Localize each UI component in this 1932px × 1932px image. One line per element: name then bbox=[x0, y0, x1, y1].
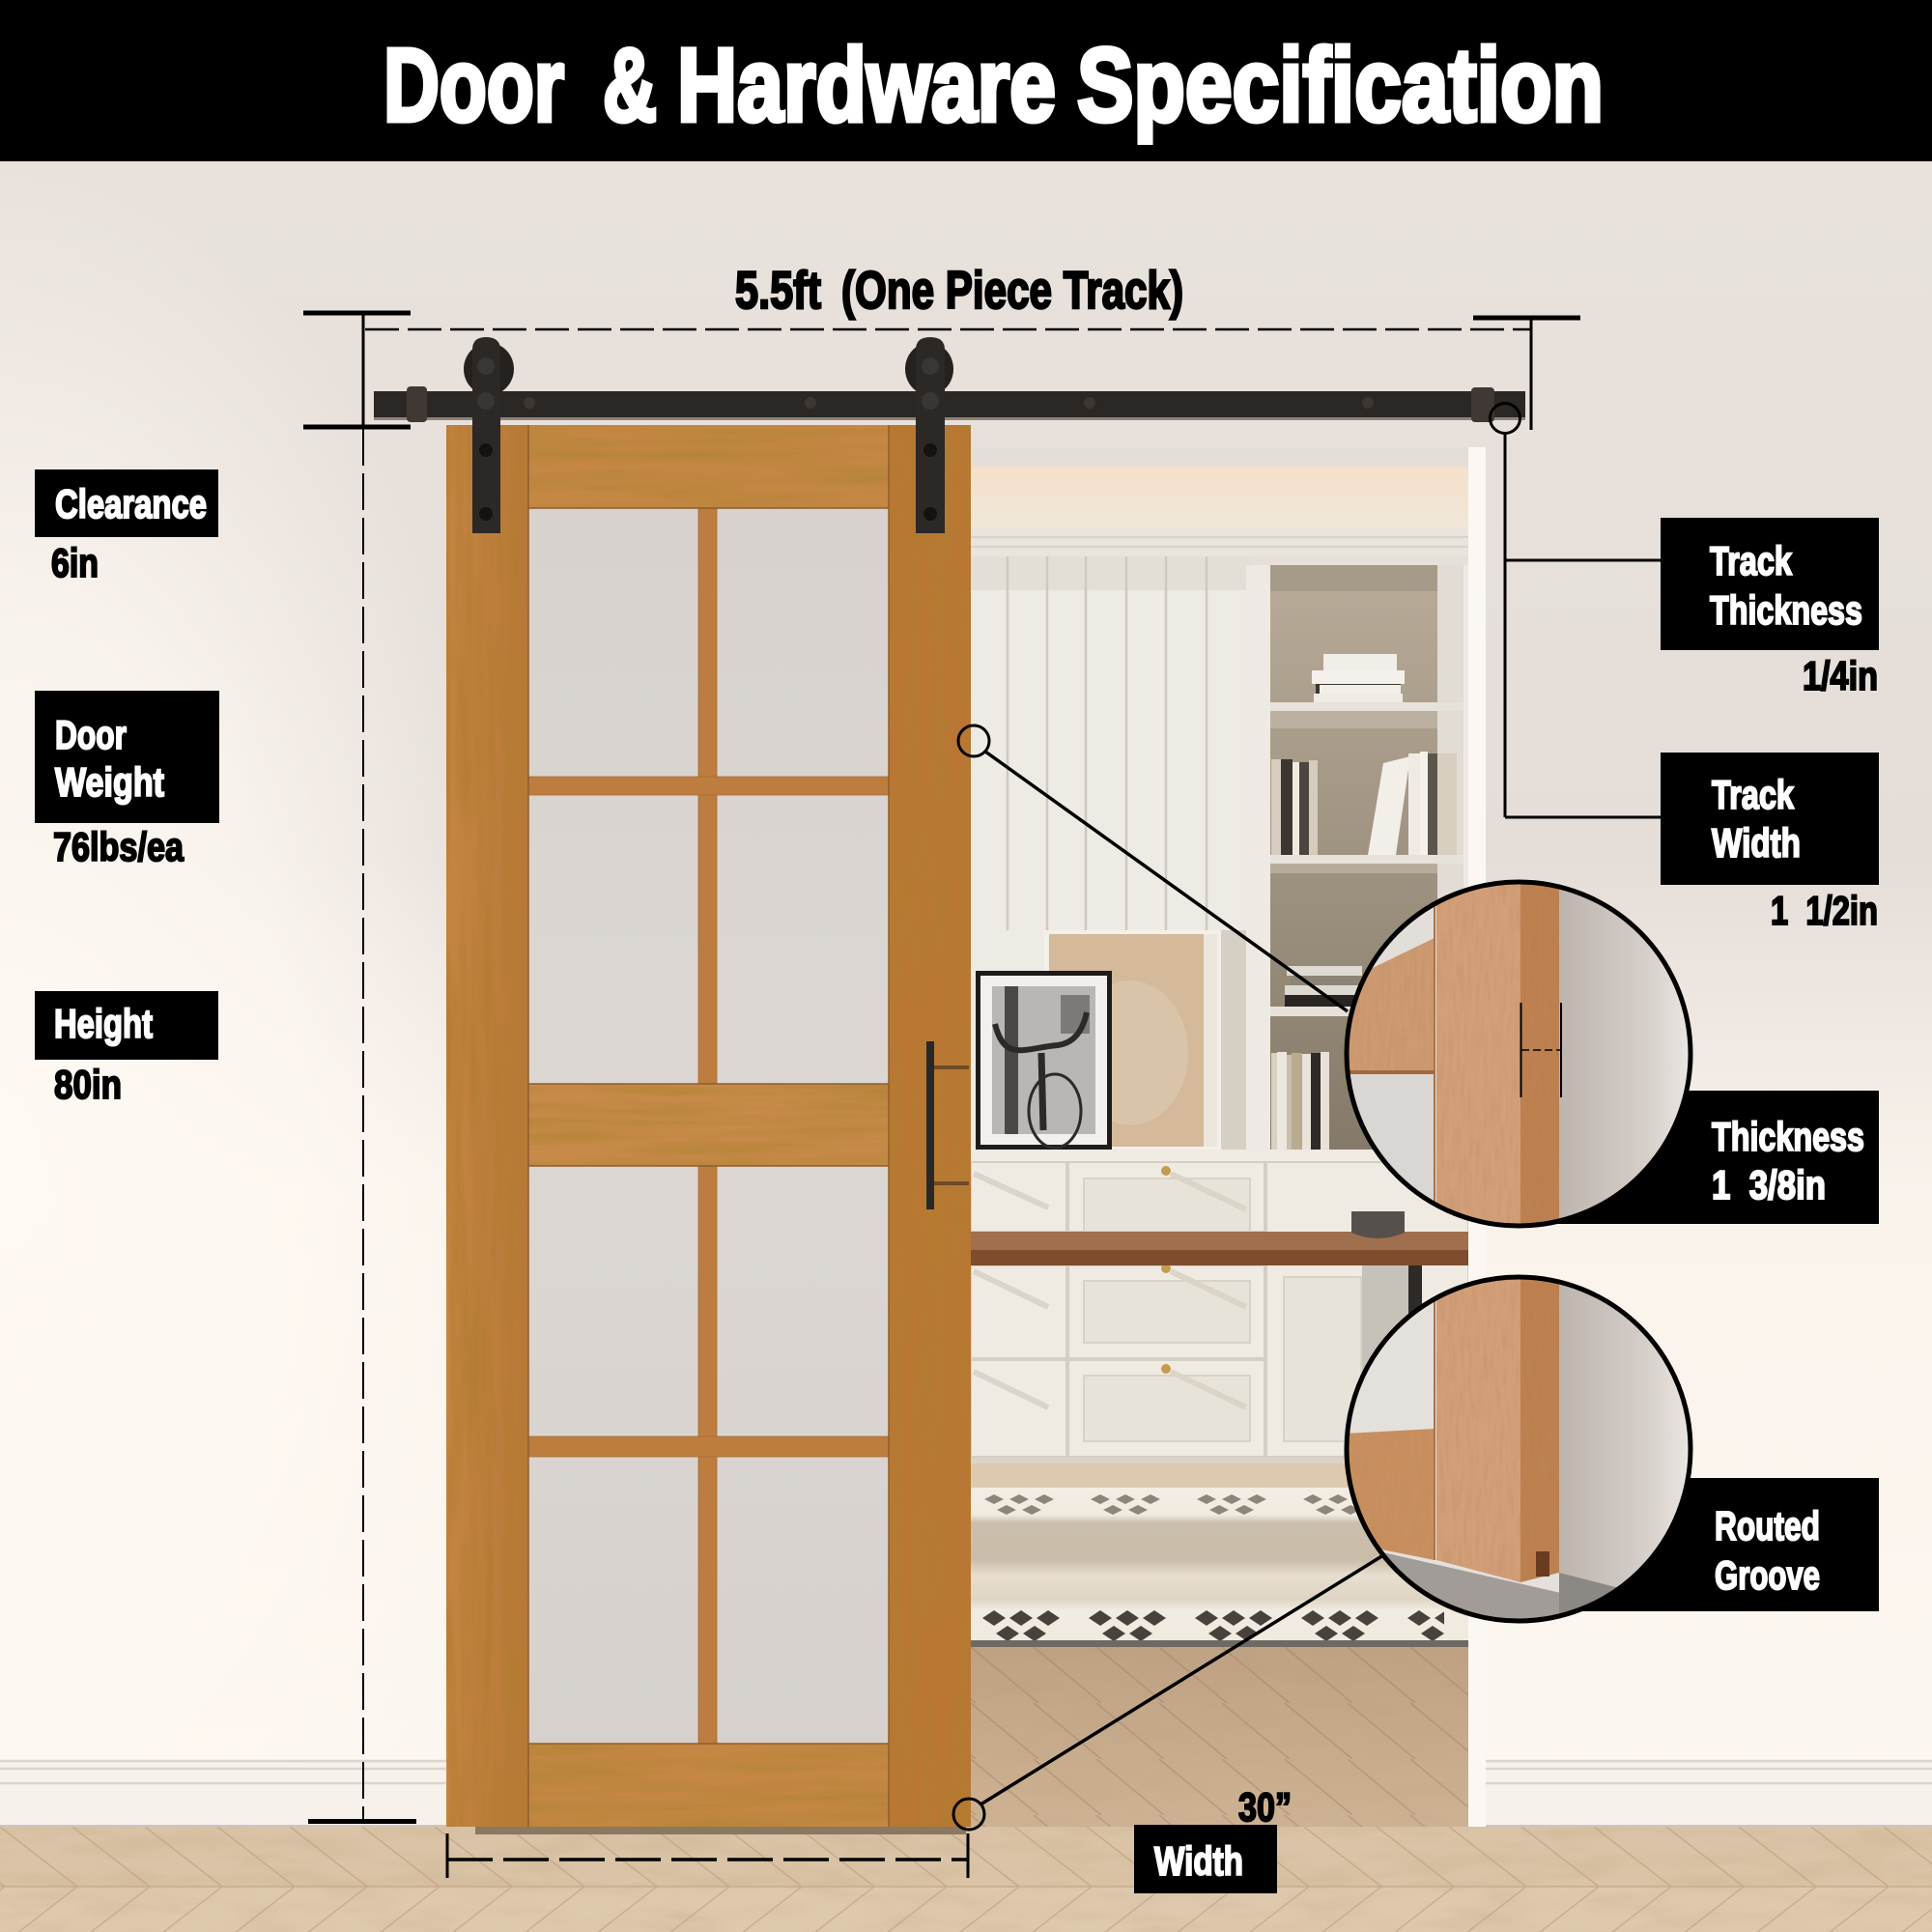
label: track thickness bbox=[1661, 518, 1879, 698]
label: clearance: Clearance bbox=[55, 481, 207, 526]
framed bicycle photo bbox=[976, 971, 1112, 1150]
title bbox=[384, 26, 1604, 143]
left hanger strap bbox=[464, 337, 514, 533]
middle rail bbox=[528, 1084, 889, 1166]
label: door weight: Door bbox=[55, 712, 127, 757]
door width dimension bbox=[447, 1833, 968, 1878]
label: routed groove bbox=[1497, 1478, 1879, 1611]
label: thickness: Thickness bbox=[1712, 1114, 1864, 1159]
label: width bbox=[1134, 1784, 1292, 1893]
title: Door bbox=[384, 26, 564, 143]
left stopper bbox=[407, 386, 427, 422]
label: track width bbox=[1661, 753, 1879, 933]
door height dimension bbox=[308, 429, 416, 1824]
barn door track bbox=[374, 386, 1525, 422]
label: routed groove: Routed bbox=[1715, 1503, 1820, 1548]
door shadow bbox=[475, 1827, 966, 1834]
label: height bbox=[35, 991, 218, 1107]
magnifier: door thickness detail bbox=[1345, 880, 1692, 1228]
soffit and cove light bbox=[971, 467, 1468, 548]
cabinets bbox=[971, 1150, 1468, 1463]
label: thickness bbox=[1497, 1091, 1879, 1224]
right stopper bbox=[1471, 387, 1494, 422]
top rail bbox=[528, 425, 889, 508]
barn door bbox=[446, 425, 971, 1827]
title: Hardware bbox=[677, 26, 1056, 143]
muntins bbox=[528, 508, 889, 1744]
label: clearance bbox=[35, 469, 218, 585]
label: routed groove: Groove bbox=[1715, 1552, 1820, 1598]
label: height: 80in bbox=[54, 1062, 122, 1107]
label: clearance: 6in bbox=[51, 540, 99, 585]
glass panes bbox=[528, 508, 889, 1744]
left stile bbox=[446, 425, 528, 1827]
label: thickness: 1 3/8in bbox=[1712, 1162, 1826, 1208]
label: door weight bbox=[35, 691, 219, 869]
panelled back wall bbox=[971, 556, 1251, 1155]
door trim bbox=[1468, 447, 1486, 1827]
magnifier: routed groove detail bbox=[1345, 1275, 1692, 1623]
right stile bbox=[889, 425, 971, 1827]
bookcase bbox=[1246, 565, 1468, 1154]
baseboard bbox=[0, 1760, 1932, 1827]
wood floor bbox=[0, 1827, 1932, 1932]
label: track width: 1 1/2in bbox=[1771, 888, 1878, 933]
label: track thickness: 1/4in bbox=[1803, 653, 1878, 698]
leader lines for track callouts bbox=[1490, 404, 1661, 817]
label: door weight: 76lbs/ea bbox=[53, 824, 185, 869]
label: track thickness: Thickness bbox=[1710, 587, 1862, 633]
bottom rail bbox=[528, 1744, 889, 1827]
door handle bbox=[926, 1041, 969, 1209]
label: width: Width bbox=[1154, 1838, 1243, 1884]
track length dimension bbox=[303, 260, 1580, 430]
label: door weight: Weight bbox=[55, 759, 164, 805]
right hanger strap bbox=[905, 337, 953, 533]
room seen through doorway bbox=[971, 447, 1468, 1827]
label: track width: Track bbox=[1712, 772, 1794, 817]
room floor and rug bbox=[971, 1463, 1468, 1827]
leader lines to magnifier circles bbox=[953, 725, 1383, 1830]
label: track thickness: Track bbox=[1710, 538, 1792, 583]
books bbox=[1271, 654, 1457, 1150]
thickness dimension marks bbox=[1520, 1003, 1561, 1097]
track length label: 5.5ft bbox=[735, 260, 821, 320]
title: Specification bbox=[1077, 26, 1604, 143]
label: track width: Width bbox=[1712, 820, 1801, 866]
label: height: Height bbox=[54, 1001, 153, 1046]
header band bbox=[0, 0, 1932, 161]
title: & bbox=[603, 26, 657, 143]
label: width: 30” bbox=[1238, 1784, 1292, 1830]
track length label bbox=[735, 260, 1183, 320]
track length label: (One Piece Track) bbox=[841, 260, 1183, 320]
desk top and cup bbox=[971, 1211, 1468, 1265]
beige poster bbox=[1049, 934, 1204, 1147]
track bolts bbox=[524, 397, 1374, 409]
